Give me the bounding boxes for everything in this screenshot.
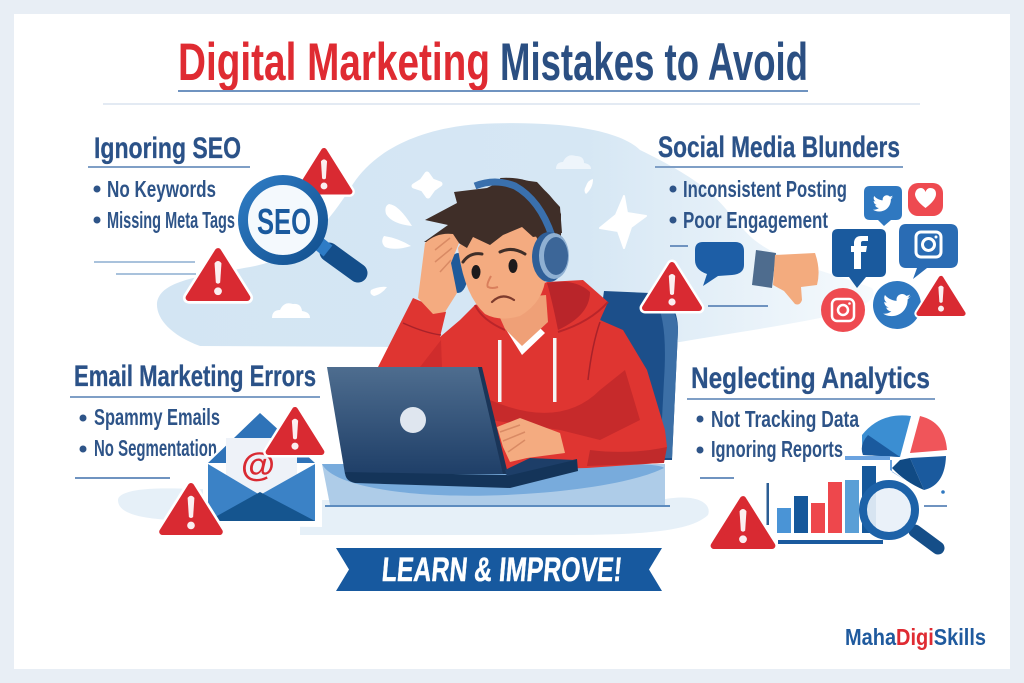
bullets: No Segmentation [94, 435, 217, 461]
icon: instagram bubble [899, 224, 958, 279]
icon: warning top SEO [298, 151, 350, 192]
icon: speech bubble [695, 242, 744, 286]
icon: warning analytics [714, 499, 772, 546]
laptop base [345, 459, 578, 488]
banner: learn and improve: LEARN & IMPROVE! [380, 551, 624, 589]
icon: SEO magnifier: SEO [257, 201, 311, 242]
title [103, 33, 920, 105]
heading: Social Media Blunders: Social Media Blunders [658, 131, 900, 164]
heading: Neglecting Analytics: Neglecting Analytics [691, 362, 930, 395]
heading rule [70, 396, 320, 398]
desk [118, 464, 709, 535]
hair [424, 178, 562, 248]
shirt [505, 318, 545, 355]
section: Neglecting Analytics [687, 362, 947, 507]
bullets [670, 176, 847, 233]
right earcup [532, 232, 569, 282]
raised hand [418, 234, 459, 314]
logo: MahaDigiSkills: MahaDigiSkills [845, 624, 986, 650]
icon: warning low SEO [189, 251, 247, 298]
icon: warning email low [162, 486, 220, 532]
at sign: @ [241, 446, 275, 483]
icon: analytics magnifier [863, 484, 938, 548]
section: Ignoring SEO [88, 132, 250, 275]
bullets: Spammy Emails [94, 404, 220, 430]
bullets: No Keywords [107, 176, 216, 202]
bullets [696, 406, 859, 462]
banner: learn and improve [336, 548, 662, 591]
icon: warning on envelope [269, 410, 321, 452]
icon: thumbs down [752, 250, 819, 304]
bullets [80, 404, 220, 461]
hoodie [378, 280, 667, 470]
face [458, 215, 546, 319]
icon: twitter circle [873, 281, 921, 329]
headband [475, 182, 552, 236]
title: Mistakes to Avoid [500, 33, 808, 92]
illustration: stressed person at laptop [327, 178, 678, 488]
brows [463, 249, 525, 262]
cloud puffs [272, 155, 591, 318]
background cloud [157, 123, 874, 348]
section: Social Media Blunders [655, 131, 903, 307]
bullets: Poor Engagement [683, 207, 828, 233]
icon: warning social right [919, 278, 963, 314]
section: Email Marketing Errors [70, 360, 320, 479]
laptop logo [400, 407, 426, 433]
heading: Email Marketing Errors: Email Marketing Errors [74, 360, 316, 393]
bullets: Ignoring Reports [711, 436, 843, 462]
left earcup [448, 253, 468, 293]
neck [492, 295, 548, 346]
laptop lid [327, 367, 505, 474]
bullets: Not Tracking Data [711, 406, 859, 432]
icon: warning social left [645, 265, 699, 308]
icon: facebook bubble [832, 229, 886, 288]
chair [600, 291, 678, 460]
bullets [94, 176, 235, 233]
hair back [500, 178, 561, 240]
eyes [472, 265, 480, 279]
bullets: Inconsistent Posting [683, 176, 847, 202]
title: Digital Marketing [178, 33, 490, 92]
nose and mouth [487, 276, 498, 288]
icon: instagram circle [821, 288, 865, 332]
heading rule [687, 398, 935, 400]
icon: twitter bubble [864, 186, 902, 226]
icon: envelope [203, 410, 322, 527]
heading: Ignoring SEO: Ignoring SEO [94, 132, 241, 165]
sparkles and sweat drops [370, 174, 646, 296]
heading rule [655, 166, 903, 168]
chart: bars [766, 466, 883, 544]
heading rule [88, 166, 250, 168]
chart: pie [845, 415, 947, 490]
icon: heart badge [908, 183, 943, 216]
icon: SEO magnifier [243, 180, 358, 273]
typing hand [497, 418, 565, 462]
drawstrings [498, 340, 502, 402]
bullets: Missing Meta Tags [107, 207, 235, 233]
